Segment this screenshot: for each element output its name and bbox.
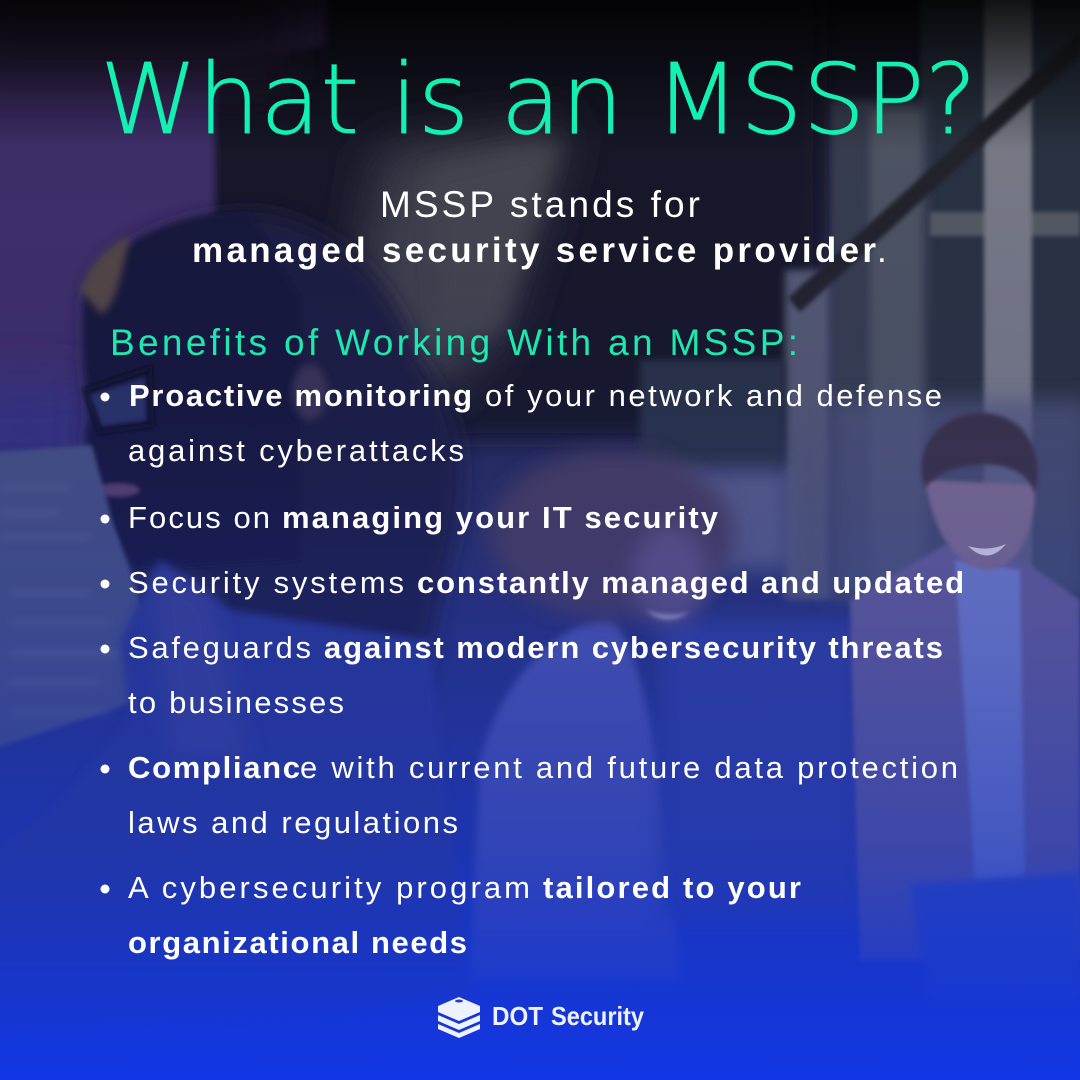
bullet: tailored program: A cybersecurity program [128, 870, 530, 905]
bullet: tailored program: organizational needs [128, 925, 467, 960]
right side window area [920, 0, 1080, 620]
logo: DOT Security [438, 997, 644, 1038]
definition text: managed security service provider [192, 231, 876, 270]
middle woman: hair [490, 451, 734, 619]
woman on right: jacket [850, 545, 1080, 960]
bullet: proactive monitoring: of your network and defense [485, 378, 942, 413]
logo wordmark: Security [551, 1001, 644, 1031]
man shoulder and shirt [0, 560, 470, 1040]
bullet: proactive monitoring: against cyberattacks [128, 433, 464, 468]
bullet: safeguards: Safeguards [128, 630, 311, 665]
bullet: tailored program [100, 870, 801, 960]
hair texture [80, 235, 130, 315]
man head and torso silhouette [85, 212, 462, 700]
middle woman: jacket [470, 620, 680, 980]
bullet: systems managed: constantly managed and updated [417, 565, 964, 600]
bullet: safeguards: against modern cybersecurity threats [324, 630, 943, 665]
logo wordmark [492, 1001, 644, 1031]
bullet: systems managed [100, 565, 964, 600]
benefits heading: Benefits of Working With an MSSP: [110, 322, 798, 363]
glasses [85, 368, 152, 432]
title: What is an MSSP? [100, 43, 977, 156]
diagonal beam [788, 32, 1080, 312]
dark centre wall [200, 0, 820, 440]
grey wedge [340, 120, 570, 400]
bullet: compliance: e with current and future data protection [300, 750, 958, 785]
bullet: compliance: Complianc [128, 750, 300, 785]
bullet: tailored program: tailored to your [543, 870, 801, 905]
bullet: proactive monitoring [100, 378, 942, 468]
bullet: focus on IT security: managing your IT security [282, 500, 719, 535]
woman on right: face [925, 480, 1035, 570]
bullet: compliance [100, 750, 958, 840]
monitor with code lines [0, 445, 170, 760]
definition text [192, 184, 887, 270]
bullet: focus on IT security: Focus on [128, 500, 270, 535]
ear [292, 364, 328, 420]
bullet: systems managed: Security systems [128, 565, 404, 600]
lips [96, 483, 140, 497]
benefits list [100, 378, 964, 960]
purple left wall [0, 0, 330, 760]
bullet: proactive monitoring: Proactive monitoring [129, 378, 472, 413]
icon: stacked layers [438, 997, 480, 1038]
bullet: compliance: laws and regulations [128, 805, 458, 840]
bullet: safeguards [100, 630, 943, 720]
middle woman: face [632, 525, 708, 625]
definition text: . [877, 231, 887, 270]
laptop [910, 872, 1080, 1000]
logo wordmark: DOT [492, 1001, 543, 1031]
bullet: safeguards: to businesses [128, 685, 344, 720]
definition text: MSSP stands for [380, 184, 700, 225]
